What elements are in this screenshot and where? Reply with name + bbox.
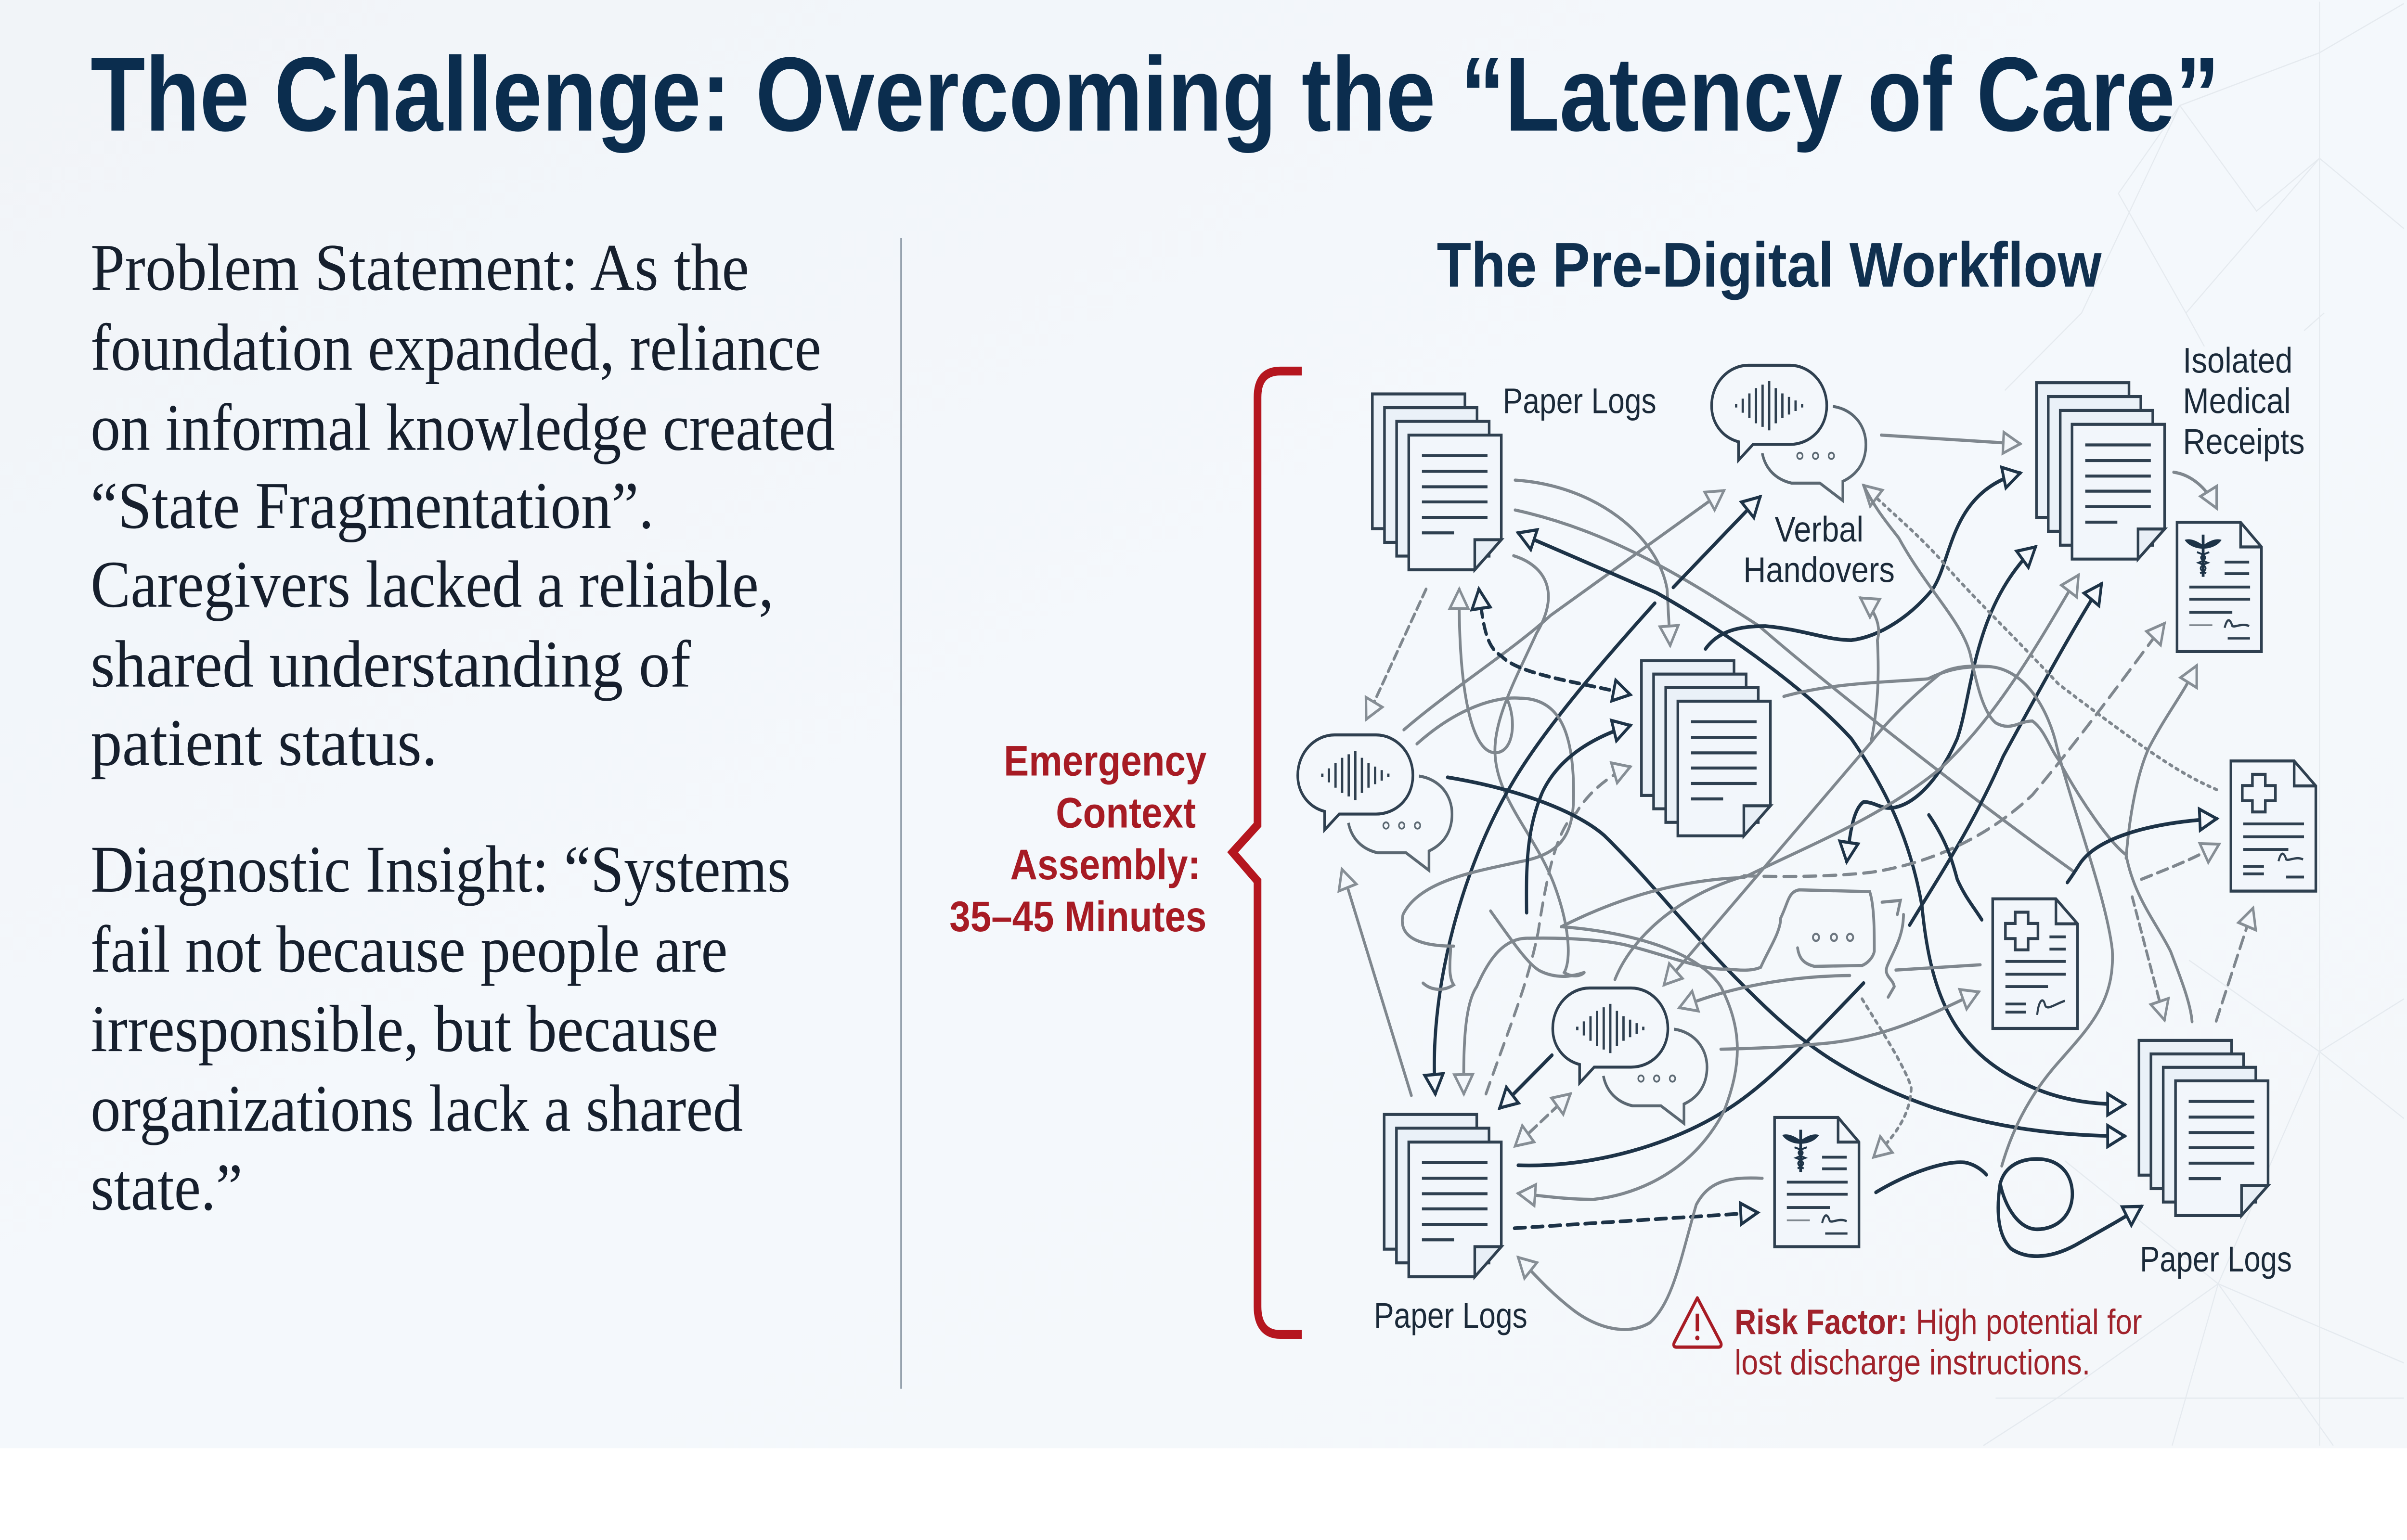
- callout: emergency context assembly time: Assembly:: [1010, 840, 1201, 888]
- title: The Challenge: Overcoming the “Latency of Care”: [91, 35, 2220, 153]
- arrow: dark left bubble to bottom right logs: [1448, 777, 2124, 1136]
- arrow: paper logs to center stack: [1515, 480, 1670, 645]
- icon: speech bubbles bottom: [1553, 988, 1707, 1123]
- arrow: dark to cross document: [2067, 819, 2217, 883]
- text block: diagnostic insight: [91, 833, 790, 1224]
- line: thin grey small curl: [1423, 946, 1454, 989]
- text block: problem statement: foundation expanded, reliance: [91, 311, 821, 385]
- icon: paper stack center: [1642, 661, 1771, 836]
- label: verbal handovers: Handovers: [1743, 550, 1895, 590]
- icon: cross document center: [1993, 899, 2078, 1028]
- arrow: grey swoop to bottom logs: [1518, 1178, 1762, 1330]
- arrow: thin dashed to bottom right logs: [2132, 897, 2164, 1020]
- callout: risk factor: lost discharge instructions.: [1734, 1343, 2090, 1382]
- tangle of workflow arrows: [1342, 435, 2253, 1330]
- arrow: dark line with circular loop to bottom right logs: [1876, 1159, 2141, 1256]
- line: paper logs across diagram: [1515, 510, 2072, 871]
- callout: emergency context assembly time: Emergency: [1004, 737, 1207, 785]
- text block: diagnostic insight: organizations lack a shared: [91, 1072, 743, 1146]
- line: grey to second cross document: [1896, 965, 1980, 970]
- faint network background pattern: [1983, 2, 2404, 1446]
- arrow: dark to verbal handovers: [1673, 497, 1760, 588]
- text block: problem statement: Caregivers lacked a reliable,: [91, 548, 774, 622]
- icon: medical receipt lower: [1774, 1117, 1859, 1247]
- arrow: grey straight to left bubble: [1342, 869, 1411, 1095]
- icon: paper stack top-right: [2036, 383, 2164, 559]
- text block: problem statement: Problem Statement: As the: [91, 231, 749, 305]
- label: paper logs bottom right: Paper Logs: [2140, 1239, 2292, 1279]
- line: thin grey squiggle near speech shape: [1882, 900, 1903, 997]
- icon: warning triangle: [1674, 1298, 1721, 1347]
- arrow: dark dashed logs to lower receipt: [1514, 1213, 1758, 1228]
- label: verbal handovers: Verbal: [1774, 509, 1863, 550]
- arrow: double-ended long dark curve: [1518, 533, 2124, 1104]
- label: paper logs bottom left: Paper Logs: [1374, 1296, 1527, 1335]
- arrow: dark wave to top right stack: [1706, 473, 2020, 649]
- text block: diagnostic insight: Diagnostic Insight: “Systems: [91, 833, 790, 907]
- icon: paper stack bottom-right: [2139, 1040, 2268, 1216]
- line: dark short: [1929, 815, 1982, 920]
- text block: problem statement: on informal knowledge created: [91, 391, 835, 465]
- divider between text and diagram: [901, 238, 902, 1389]
- arrow: stack to medical receipt: [2174, 472, 2217, 508]
- arrow: grey to bottom bubble: [1664, 666, 1988, 985]
- arrow: grey up to handovers label: [1861, 598, 1878, 740]
- callout: emergency context assembly time: 35–45 Minutes: [949, 892, 1206, 940]
- arrow: grey dashed to cross document: [2141, 844, 2219, 879]
- callout: risk factor: Risk Factor: High potential for: [1734, 1302, 2142, 1342]
- arrow: thin dashed to left bubble: [1366, 589, 1426, 719]
- icon: wobbly dotted speech bubble with arrow to bottom logs: [1463, 890, 1874, 1094]
- label: isolated medical receipts: [2183, 341, 2305, 462]
- line: thin grey curl: [1490, 911, 1584, 976]
- line: dark from bottom logs: [1518, 983, 1863, 1166]
- arrow: dotted to verbal handovers: [1863, 486, 2217, 790]
- arrow: grey loop up to top logs: [1459, 589, 1513, 753]
- callout: emergency context assembly time: Context: [1056, 788, 1196, 837]
- arrow: thin grey up to receipt: [2126, 666, 2197, 858]
- text block: diagnostic insight: irresponsible, but because: [91, 992, 718, 1066]
- icon: speech bubbles top: [1711, 365, 1866, 500]
- callout: emergency context assembly time: [949, 737, 1207, 940]
- text block: diagnostic insight: state.”: [91, 1151, 243, 1224]
- label: isolated medical receipts: Isolated: [2183, 341, 2292, 381]
- arrow: long dark arc to bottom logs: [1434, 603, 1655, 1094]
- arrow: dark curve to center stack: [1527, 725, 1630, 913]
- label: paper logs top: Paper Logs: [1503, 381, 1656, 421]
- line: large grey loop: [1402, 698, 1574, 946]
- arrow: dashed logs to cross document: [2216, 908, 2253, 1021]
- red curly bracket: [1233, 371, 1302, 1335]
- icon: speech bubbles left: [1298, 735, 1452, 871]
- diagram heading: The Pre-Digital Workflow: The Pre-Digital Workflow: [1437, 230, 2102, 300]
- arrow: left bubble to verbal handovers: [1404, 491, 1724, 730]
- icon: cross document right: [2231, 761, 2316, 891]
- line: thin looping grey: [1495, 556, 1584, 976]
- line: grey from bottom bubble: [1615, 876, 1746, 979]
- arrow: grey to bottom bubble: [1680, 975, 1850, 1008]
- text block: problem statement: “State Fragmentation”.: [91, 469, 654, 543]
- arrow: dotted to lower receipt: [1862, 999, 1911, 1157]
- text block: diagnostic insight: fail not because people are: [91, 912, 727, 987]
- label: verbal handovers: [1743, 509, 1895, 590]
- label: isolated medical receipts: Medical: [2183, 381, 2291, 421]
- line: grey from bubble to bottom right logs: [1863, 486, 2192, 1022]
- line: grey long loop: [1784, 667, 2112, 1166]
- text block: problem statement: [91, 231, 835, 780]
- label: isolated medical receipts: Receipts: [2183, 422, 2305, 462]
- arrow: dark bubble to bottom logs: [1500, 1055, 1552, 1108]
- arrow: dark s-curve to speech shape and stack: [1847, 547, 2035, 862]
- icon: medical receipt upper: [2177, 522, 2262, 652]
- arrow: dashed double-ended bubble and logs: [1515, 1094, 1570, 1146]
- icon: paper stack bottom-left: [1384, 1115, 1501, 1277]
- icon: paper stack top-left: [1372, 394, 1501, 570]
- arrow: grey dashed bottom logs to center stack: [1486, 767, 1630, 1094]
- arrow: grey bubble to second cross document: [1721, 992, 1979, 1049]
- callout: risk factor: [1734, 1302, 2142, 1382]
- arrow: dark up to top right stack: [1910, 584, 2101, 925]
- arrow: bubble to top right stack: [1881, 435, 2020, 444]
- arrow: grey arc to bottom logs: [1518, 927, 1737, 1199]
- arrow: dark dashed between stacks: [1479, 589, 1630, 694]
- text block: problem statement: shared understanding of: [91, 628, 691, 702]
- arrow: thick grey dashed to receipt: [1744, 623, 2164, 876]
- text block: problem statement: patient status.: [91, 706, 438, 780]
- arrow: long grey to top right stack: [1561, 575, 2079, 927]
